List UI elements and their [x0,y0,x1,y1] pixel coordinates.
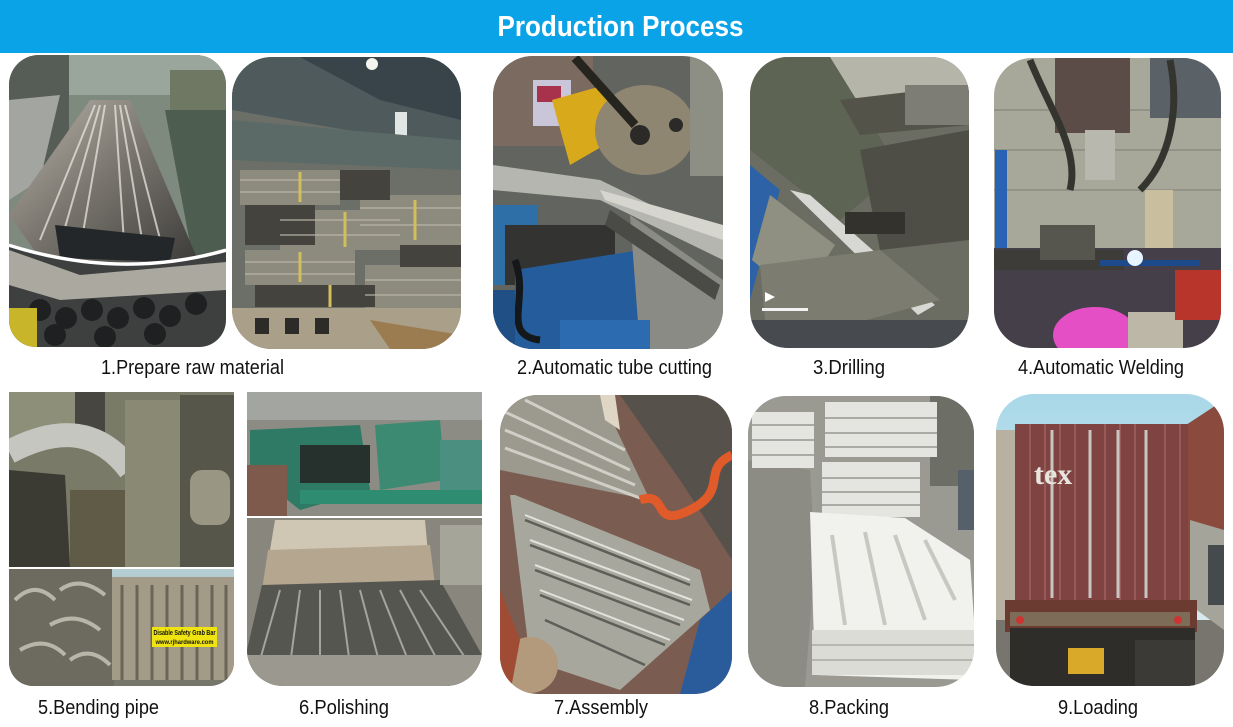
photo: tube rows in workshop [9,55,226,270]
white curved divider [9,245,226,264]
label: step 3: 3.Drilling [813,357,885,379]
label: step 8: 8.Packing [809,697,889,719]
panel: automatic welding photo [994,58,1221,363]
panel: assembly photo [500,395,732,694]
label: step 4: 4.Automatic Welding [1018,357,1184,379]
container lettering: tex [1034,458,1072,491]
sign: product tag: www.rjhardware.com [155,640,214,646]
panel: drilling photo [750,57,969,348]
label: step 7: 7.Assembly [554,697,648,719]
panel: loading photo [996,394,1224,686]
panel: bending pipe photos [9,392,234,686]
title banner: Production Process [498,11,744,43]
label: step 9: 9.Loading [1058,697,1138,719]
label: step 6: 6.Polishing [299,697,389,719]
panel: automatic tube cutting photo [493,56,723,349]
photo: tube ends stack [9,247,226,348]
panel: prepare raw material [9,55,461,349]
label: step 2: 2.Automatic tube cutting [517,357,712,379]
sign: product tag: Disable Safety Grab Bar [154,630,216,637]
label: step 5: 5.Bending pipe [38,697,159,719]
panel: polishing photos [247,392,482,686]
sign: product tag [152,627,217,647]
photo: bundled tube stacks [232,57,461,349]
title banner [0,0,1233,53]
label: step 1: 1.Prepare raw material [101,357,284,379]
panel: packing photo [748,396,974,687]
